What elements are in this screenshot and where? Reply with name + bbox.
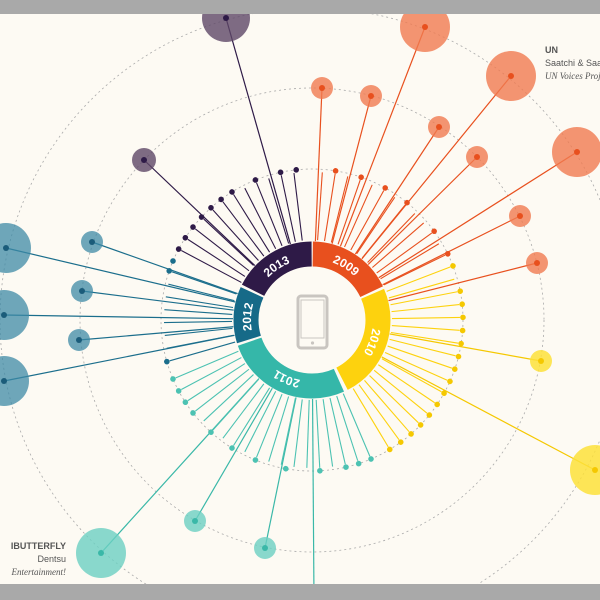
year ring: 2011 (274, 370, 300, 388)
year ring: 2012 (242, 303, 254, 331)
year ring: 2013 (264, 256, 290, 278)
spokes (164, 172, 460, 468)
label: UN (545, 45, 600, 81)
icon: phone (298, 296, 327, 348)
label: IBUTTERFLY (10, 541, 66, 577)
year ring: 2010 (364, 328, 380, 356)
label: IBUTTERFLY: IBUTTERFLY (11, 541, 66, 551)
year ring: 2009 (332, 256, 359, 275)
label: IBUTTERFLY: Dentsu (37, 554, 66, 564)
label: IBUTTERFLY: Entertainment! (10, 567, 66, 577)
label: UN: UN (545, 45, 558, 55)
year ring (233, 241, 390, 399)
spoke end dots (163, 167, 466, 474)
